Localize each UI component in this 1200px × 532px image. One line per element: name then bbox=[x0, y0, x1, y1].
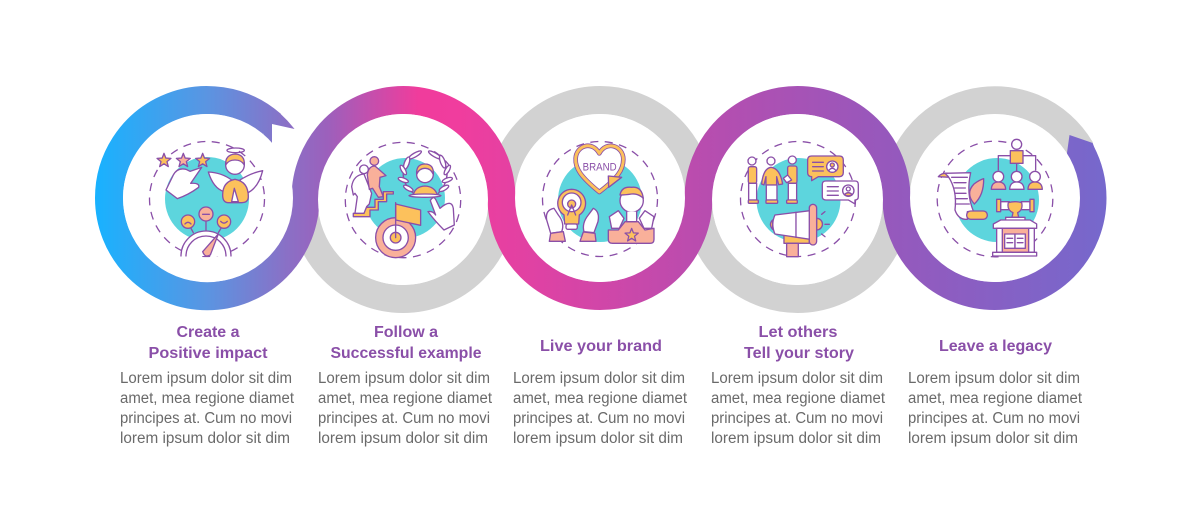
ribbon end bbox=[1066, 135, 1098, 160]
column 2 heading: Successful example bbox=[330, 345, 482, 362]
speech bubble white bbox=[822, 181, 858, 204]
megaphone bbox=[770, 204, 829, 257]
column 4 heading bbox=[744, 324, 854, 362]
pointing hand bbox=[166, 167, 202, 199]
column 3 heading: Live your brand bbox=[540, 338, 662, 355]
icon: tell your story bbox=[740, 142, 858, 257]
column 5 text: Lorem ipsum dolor sit dim bbox=[908, 370, 1080, 387]
proud person bbox=[608, 187, 654, 243]
column 5 text bbox=[908, 370, 1083, 447]
column 3 text: lorem ipsum dolor sit dim bbox=[513, 430, 683, 447]
pointing hand bbox=[428, 198, 454, 230]
column 2 text: principes at. Cum no movi bbox=[318, 410, 490, 427]
column 4 text: principes at. Cum no movi bbox=[711, 410, 883, 427]
column 1 heading: Create a bbox=[176, 324, 240, 341]
column 5 text: lorem ipsum dolor sit dim bbox=[908, 430, 1078, 447]
column 2 text bbox=[318, 370, 493, 447]
brand label: BRAND bbox=[583, 161, 617, 173]
icon: positive impact bbox=[150, 142, 264, 256]
scroll bbox=[938, 173, 987, 219]
stairs bbox=[353, 192, 393, 217]
column 1 heading bbox=[148, 324, 268, 362]
climbers bbox=[352, 157, 386, 213]
speedometer bbox=[181, 231, 231, 256]
arrow tail bbox=[262, 111, 294, 146]
stars bbox=[157, 153, 210, 167]
column 4 heading: Tell your story bbox=[744, 345, 854, 362]
column 4 heading: Let others bbox=[758, 324, 838, 341]
column 3 text: Lorem ipsum dolor sit dim bbox=[513, 370, 685, 387]
mood faces bbox=[181, 207, 231, 233]
column 2 text: lorem ipsum dolor sit dim bbox=[318, 430, 488, 447]
white discs bbox=[123, 114, 1080, 285]
column 4 text: lorem ipsum dolor sit dim bbox=[711, 430, 881, 447]
quill bbox=[970, 179, 984, 204]
column 1 heading: Positive impact bbox=[148, 345, 268, 362]
three people bbox=[748, 156, 797, 203]
column 4 text: Lorem ipsum dolor sit dim bbox=[711, 370, 883, 387]
column 5 text: principes at. Cum no movi bbox=[908, 410, 1080, 427]
column 3 text: principes at. Cum no movi bbox=[513, 410, 685, 427]
laurel winner bbox=[398, 150, 453, 197]
column 2 text: Lorem ipsum dolor sit dim bbox=[318, 370, 490, 387]
column 1 text: lorem ipsum dolor sit dim bbox=[120, 430, 290, 447]
column 1 text: Lorem ipsum dolor sit dim bbox=[120, 370, 292, 387]
org chart bbox=[991, 139, 1042, 189]
target and flag bbox=[376, 203, 421, 258]
open hands bbox=[546, 208, 598, 241]
gray arcs bbox=[304, 100, 1081, 299]
column 1 text: amet, mea regione diamet bbox=[120, 390, 295, 407]
column 2 heading bbox=[330, 324, 482, 362]
column 2 text: amet, mea regione diamet bbox=[318, 390, 493, 407]
column 4 text bbox=[711, 370, 886, 447]
column 3 text bbox=[513, 370, 688, 447]
icon: successful example bbox=[345, 142, 461, 258]
speech bubble orange bbox=[808, 156, 843, 181]
column 1 text: principes at. Cum no movi bbox=[120, 410, 292, 427]
column 2 heading: Follow a bbox=[374, 324, 438, 341]
column 5 text: amet, mea regione diamet bbox=[908, 390, 1083, 407]
icon: live your brand bbox=[542, 142, 658, 256]
gradient ribbon bbox=[109, 100, 1098, 296]
idea bulb bbox=[558, 189, 586, 229]
icon: leave a legacy bbox=[937, 139, 1053, 257]
podium with book bbox=[993, 217, 1037, 256]
column 4 text: amet, mea regione diamet bbox=[711, 390, 886, 407]
column 5 heading: Leave a legacy bbox=[939, 338, 1052, 355]
column 3 text: amet, mea regione diamet bbox=[513, 390, 688, 407]
angel bbox=[208, 148, 263, 203]
trophy handover bbox=[997, 199, 1034, 217]
column 1 text bbox=[120, 370, 295, 447]
